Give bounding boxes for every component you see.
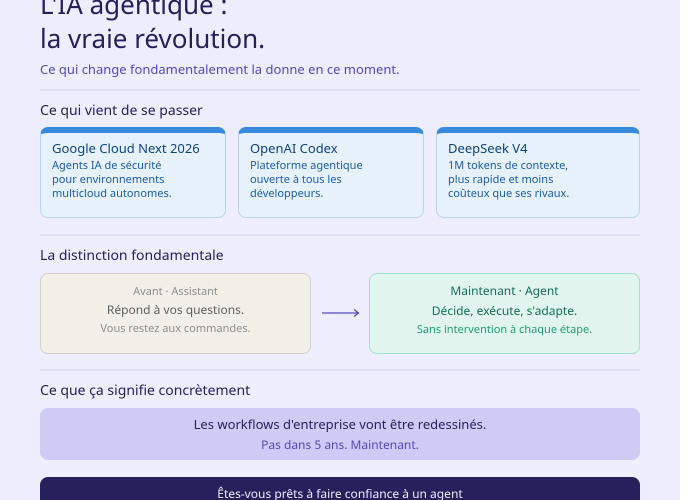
card text: développeurs. — [250, 186, 323, 200]
card: Google Cloud Next 2026 — [40, 127, 226, 218]
card text: Plateforme agentique — [250, 158, 363, 172]
card text — [448, 158, 569, 200]
panel main text: Les workflows d'entreprise vont être redessinés. — [194, 415, 486, 433]
panel: before, assistant — [40, 273, 311, 354]
card text: plus rapide et moins — [448, 172, 553, 186]
panel: now, agent — [369, 273, 640, 354]
card: OpenAI Codex — [238, 127, 424, 218]
card text — [250, 158, 363, 200]
heading: the fundamental distinction: La distinction fondamentale — [40, 246, 224, 265]
title: la vraie révolution. — [40, 20, 265, 56]
card text — [52, 158, 172, 200]
card title: DeepSeek V4 — [448, 138, 528, 156]
card text: pour environnements — [52, 172, 164, 186]
card text: ouverte à tous les — [250, 172, 342, 186]
panel note: Vous restez aux commandes. — [100, 321, 251, 336]
card title: Google Cloud Next 2026 — [52, 138, 200, 156]
title — [40, 0, 265, 56]
subtitle: Ce qui change fondamentalement la donne en ce moment. — [40, 60, 400, 78]
card text: Agents IA de sécurité — [52, 158, 161, 172]
card title: OpenAI Codex — [250, 138, 338, 156]
heading: what it means concretely: Ce que ça signifie concrètement — [40, 381, 250, 400]
panel note: Pas dans 5 ans. Maintenant. — [261, 436, 419, 453]
panel label: Maintenant · Agent — [450, 282, 559, 299]
panel note: Sans intervention à chaque étape. — [417, 322, 592, 337]
card: DeepSeek V4 — [436, 127, 640, 218]
heading: what just happened: Ce qui vient de se passer — [40, 101, 203, 120]
panel main text: Décide, exécute, s'adapte. — [432, 302, 577, 319]
panel label: Avant · Assistant — [133, 284, 218, 299]
panel main text: Répond à vos questions. — [107, 301, 244, 318]
panel: closing question — [40, 477, 640, 500]
panel: enterprise workflows — [40, 408, 640, 460]
card text: multicloud autonomes. — [52, 186, 172, 200]
arrow: before to now — [322, 309, 360, 317]
card text: coûteux que ses rivaux. — [448, 186, 569, 200]
card text: 1M tokens de contexte, — [448, 158, 568, 172]
